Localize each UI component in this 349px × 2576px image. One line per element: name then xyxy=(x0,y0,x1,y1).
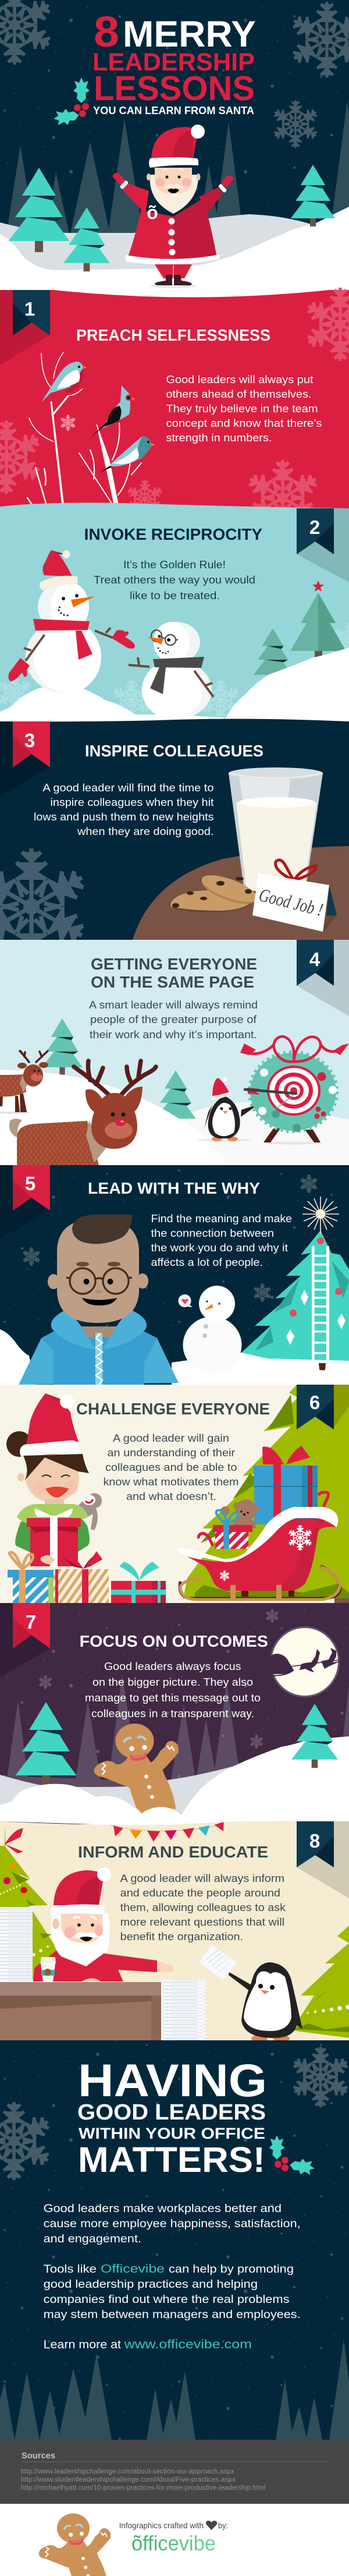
heading: PREACH SELFLESSNESS xyxy=(76,326,270,344)
panel: lesson 6 challenge everyone xyxy=(0,1385,349,1603)
body text: affects a lot of people. xyxy=(151,1256,263,1268)
credit line: by: xyxy=(218,2521,228,2530)
small tree xyxy=(254,628,292,682)
body text: and educate the people around xyxy=(120,1887,280,1899)
ribbon 1 xyxy=(13,290,50,335)
illustration: santa: õ xyxy=(147,202,158,223)
body text xyxy=(120,1872,286,1942)
target wreath xyxy=(240,1036,349,1145)
body text: when they are doing good. xyxy=(77,825,214,837)
heading: LEAD WITH THE WHY xyxy=(88,1179,260,1197)
sources heading: Sources xyxy=(22,2451,55,2461)
candy cane right xyxy=(319,1492,328,1507)
card: good job xyxy=(252,873,337,933)
panel: footer credits xyxy=(0,2504,349,2576)
gift tan striped xyxy=(54,1551,109,1603)
body text: A good leader will find the time to xyxy=(43,781,214,794)
learn more xyxy=(44,2338,252,2351)
grey snow hill xyxy=(0,1766,234,1817)
ribbon shadow xyxy=(297,508,349,582)
tree left xyxy=(8,168,70,252)
ribbon 5 xyxy=(13,1165,50,1211)
panel: lesson 5 lead with the why xyxy=(0,1165,349,1385)
body text: the work you do and why it xyxy=(151,1241,288,1254)
source links: http://www.leadershipchallenge.com/about-section-our-approach.aspx xyxy=(21,2468,234,2475)
logo: officevibe: õfficevibe xyxy=(131,2531,216,2555)
ribbon shadow xyxy=(0,1165,50,1239)
subtitle: YOU CAN LEARN FROM SANTA xyxy=(93,105,254,116)
coffee cup xyxy=(40,1957,56,1982)
panel: lesson 3 inspire colleagues xyxy=(0,719,349,940)
body text xyxy=(94,558,255,601)
body text: like to be treated. xyxy=(130,589,220,601)
body text: people of the greater purpose of xyxy=(90,1013,257,1025)
heading xyxy=(77,2054,267,2179)
body text xyxy=(151,1212,292,1268)
gingerbread man xyxy=(94,1724,179,1814)
snow foreground xyxy=(0,1736,349,1825)
santa at desk xyxy=(33,1867,173,1981)
cookies xyxy=(169,870,260,912)
tree right xyxy=(291,1704,338,1768)
ribbon 7 xyxy=(13,1603,50,1648)
desk xyxy=(0,1982,161,2040)
left snow hill xyxy=(0,1070,226,1165)
left christmas tree xyxy=(0,1825,57,1980)
gift red teal xyxy=(111,1562,166,1603)
closing paragraph two: can help by promoting xyxy=(169,2263,294,2276)
body text xyxy=(85,1660,261,1719)
panel: lesson 4 getting everyone on the same page xyxy=(0,940,349,1165)
decorated christmas tree xyxy=(241,1197,349,1370)
source links xyxy=(21,2468,266,2492)
tree with star xyxy=(290,581,346,661)
body text: Find the meaning and make xyxy=(151,1212,292,1225)
mid tree xyxy=(155,1070,196,1126)
closing paragraph one: and engagement. xyxy=(44,2232,141,2245)
body text: Good leaders always focus xyxy=(104,1660,241,1672)
big snowman xyxy=(8,550,135,693)
body text: their work and why it’s important. xyxy=(90,1028,257,1041)
ribbon shadow xyxy=(0,290,50,365)
tree right xyxy=(291,165,335,227)
reindeer large xyxy=(9,1061,156,1165)
ribbon 4: 4 xyxy=(309,949,320,970)
panel: lesson 2 invoke reciprocity xyxy=(0,503,349,723)
tree middle xyxy=(63,207,110,271)
source links: http://www.studentleadershipchallenge.com/About/Five-practices.aspx xyxy=(21,2476,236,2483)
penguin with santa hat xyxy=(198,1077,254,1141)
closing paragraph one xyxy=(44,2202,301,2245)
woman holding gift xyxy=(6,1393,102,1567)
decorative snowflakes xyxy=(0,288,349,536)
closing paragraph two xyxy=(44,2262,301,2321)
bunting xyxy=(110,1822,224,1842)
ribbon 8 xyxy=(297,1821,334,1867)
snowman xyxy=(183,1286,242,1374)
body text xyxy=(34,781,214,837)
heading: INSPIRE COLLEAGUES xyxy=(85,742,263,760)
panel: lesson 8 inform and educate xyxy=(0,1821,349,2042)
background pine silhouettes xyxy=(5,101,349,242)
body text: It’s the Golden Rule! xyxy=(123,558,226,571)
speech bubble heart xyxy=(178,1294,193,1307)
ribbon shadow xyxy=(0,721,50,797)
closing paragraph two: Officevibe xyxy=(101,2262,165,2276)
body text: Good leaders will always put xyxy=(166,373,313,385)
icon: small snowflake xyxy=(272,100,319,148)
heading: ON THE SAME PAGE xyxy=(91,973,254,991)
learn more: Learn more at xyxy=(44,2338,121,2351)
ribbon 2 xyxy=(297,508,334,554)
icon: large snowflake xyxy=(0,848,84,940)
heading: GETTING EVERYONE xyxy=(91,955,257,973)
ribbon shadow xyxy=(297,940,349,1016)
heading: CHALLENGE EVERYONE xyxy=(76,1400,270,1418)
heading: FOCUS ON OUTCOMES xyxy=(80,1632,268,1650)
body text: and what doesn’t. xyxy=(126,1490,216,1502)
body text: A good leader will gain xyxy=(113,1432,229,1444)
body text xyxy=(166,373,322,444)
closing paragraph one: Good leaders make workplaces better and xyxy=(44,2202,282,2215)
teddy bear xyxy=(220,1499,259,1528)
closing paragraph two: companies find out where the real problems xyxy=(44,2293,290,2306)
icon: holly xyxy=(52,77,90,127)
body text: A smart leader will always remind xyxy=(89,999,258,1011)
body text: the connection between xyxy=(151,1227,274,1239)
title: 8: 8 xyxy=(94,8,119,56)
body text: lows and push them to new heights xyxy=(34,811,214,823)
ribbon 1: 1 xyxy=(24,298,35,320)
panel: lesson 7 focus on outcomes xyxy=(0,1603,349,1825)
icon: heart xyxy=(206,2521,217,2530)
body text xyxy=(89,999,258,1041)
penguin with document xyxy=(199,1945,302,2042)
closing paragraph two: Tools like xyxy=(44,2263,97,2276)
closing paragraph two: good leadership practices and helping xyxy=(44,2278,258,2291)
source links: http://michaelhyatt.com/10-proven-practices-for-more-productive-leadership.html xyxy=(21,2485,266,2492)
body text: They truly believe in the team xyxy=(166,402,318,415)
paper stack left xyxy=(0,1907,33,1983)
white branches xyxy=(27,352,141,507)
body text: more relevant questions that will xyxy=(120,1916,284,1928)
snowflake right xyxy=(290,2047,349,2107)
ribbon 8: 8 xyxy=(309,1830,320,1852)
table xyxy=(133,846,349,940)
panel: header xyxy=(0,0,349,297)
ribbon 6: 6 xyxy=(309,1392,320,1413)
body text: colleagues in a transparent way. xyxy=(91,1707,254,1719)
heading xyxy=(91,955,257,991)
glass of milk xyxy=(229,767,323,891)
man with glasses xyxy=(19,1215,179,1385)
heading: HAVING xyxy=(78,2054,267,2106)
panel: closing message xyxy=(0,2040,349,2440)
ribbon 4 xyxy=(297,940,334,986)
ribbon 5: 5 xyxy=(25,1173,35,1194)
small striped gift xyxy=(213,1510,252,1549)
body text xyxy=(104,1432,238,1502)
illustration: santa xyxy=(112,125,234,288)
body text: concept and know that there’s xyxy=(166,417,322,429)
tree left xyxy=(15,1702,77,1786)
panel: lesson 1 preach selflessness xyxy=(0,288,349,536)
moon with santa sleigh xyxy=(266,1626,343,1697)
snowflake left xyxy=(0,2102,53,2180)
title: MERRY: MERRY xyxy=(123,14,256,55)
small snowflakes xyxy=(22,1174,318,1302)
body text: benefit the organization. xyxy=(120,1930,243,1942)
right snow hill xyxy=(178,1102,349,1165)
sleigh xyxy=(178,1507,340,1600)
foreground snow xyxy=(0,207,349,297)
ribbon shadow xyxy=(297,1385,349,1429)
gingerbread man xyxy=(38,2513,111,2576)
foreground snow xyxy=(0,714,349,723)
ribbon 3 xyxy=(13,721,50,767)
icon: snowflake top left xyxy=(0,0,54,65)
ornament xyxy=(60,415,76,431)
back snow hill xyxy=(0,214,317,274)
small snowflakes xyxy=(38,1609,279,1749)
snow ground xyxy=(0,1329,349,1385)
heading: INFORM AND EDUCATE xyxy=(78,1843,268,1861)
closing paragraph two: may stem between managers and employees. xyxy=(44,2308,301,2321)
icon: snowflake top right xyxy=(289,2,349,77)
ribbon 6 xyxy=(297,1385,334,1429)
ribbon shadow xyxy=(297,1821,349,1898)
body text: A good leader will always inform xyxy=(120,1872,284,1884)
heading: INVOKE RECIPROCITY xyxy=(84,525,262,543)
ribbon 3: 3 xyxy=(24,730,35,751)
candy cane left xyxy=(198,1534,213,1546)
title: LEADERSHIP: LEADERSHIP xyxy=(92,48,255,76)
heading: WITHIN YOUR OFFICE xyxy=(79,2125,265,2142)
red bow on glass xyxy=(276,860,316,892)
credit line: Infographics crafted with xyxy=(119,2521,204,2530)
pale snowflakes xyxy=(0,623,349,721)
body text: manage to get this message out to xyxy=(85,1692,261,1704)
right christmas tree xyxy=(291,1926,349,2038)
body text: an understanding of their xyxy=(107,1446,235,1459)
reindeer small xyxy=(0,1051,48,1114)
green tree xyxy=(183,1385,349,1603)
big blue gift xyxy=(254,1446,318,1524)
body text: on the bigger picture. They also xyxy=(92,1676,253,1688)
body text: them, allowing colleagues to ask xyxy=(120,1901,286,1913)
snow hills xyxy=(0,647,349,723)
ribbon shadow xyxy=(0,1603,50,1677)
body text: Treat others the way you would xyxy=(94,574,255,586)
small snowman xyxy=(129,622,213,719)
body text: others ahead of themselves. xyxy=(166,388,312,400)
learn more: www.officevibe.com xyxy=(123,2338,252,2351)
tree back xyxy=(42,1018,83,1075)
paper stack right xyxy=(161,1980,206,2040)
panel: sources xyxy=(0,2440,349,2504)
background pines xyxy=(0,2339,349,2440)
heading: MATTERS! xyxy=(78,2140,265,2179)
closing paragraph one: cause more employee happiness, satisfaction, xyxy=(44,2217,301,2230)
body text: colleagues and be able to xyxy=(105,1461,237,1473)
body text: know what motivates them xyxy=(104,1475,238,1488)
card: good job: Good Job ! xyxy=(257,884,325,920)
title: LESSONS: LESSONS xyxy=(94,69,255,108)
background pines xyxy=(6,1674,349,1786)
icon: bird one xyxy=(41,362,87,402)
body text: strength in numbers. xyxy=(166,431,272,444)
icon: holly xyxy=(269,2135,316,2177)
ribbon 7: 7 xyxy=(26,1611,36,1633)
ribbon 2: 2 xyxy=(309,516,320,538)
heading: GOOD LEADERS xyxy=(77,2100,266,2125)
gift blue striped xyxy=(8,1552,54,1603)
icon: bird two xyxy=(90,385,135,438)
body text: inspire colleagues when they hit xyxy=(50,796,214,808)
icon: bird three xyxy=(99,436,155,473)
